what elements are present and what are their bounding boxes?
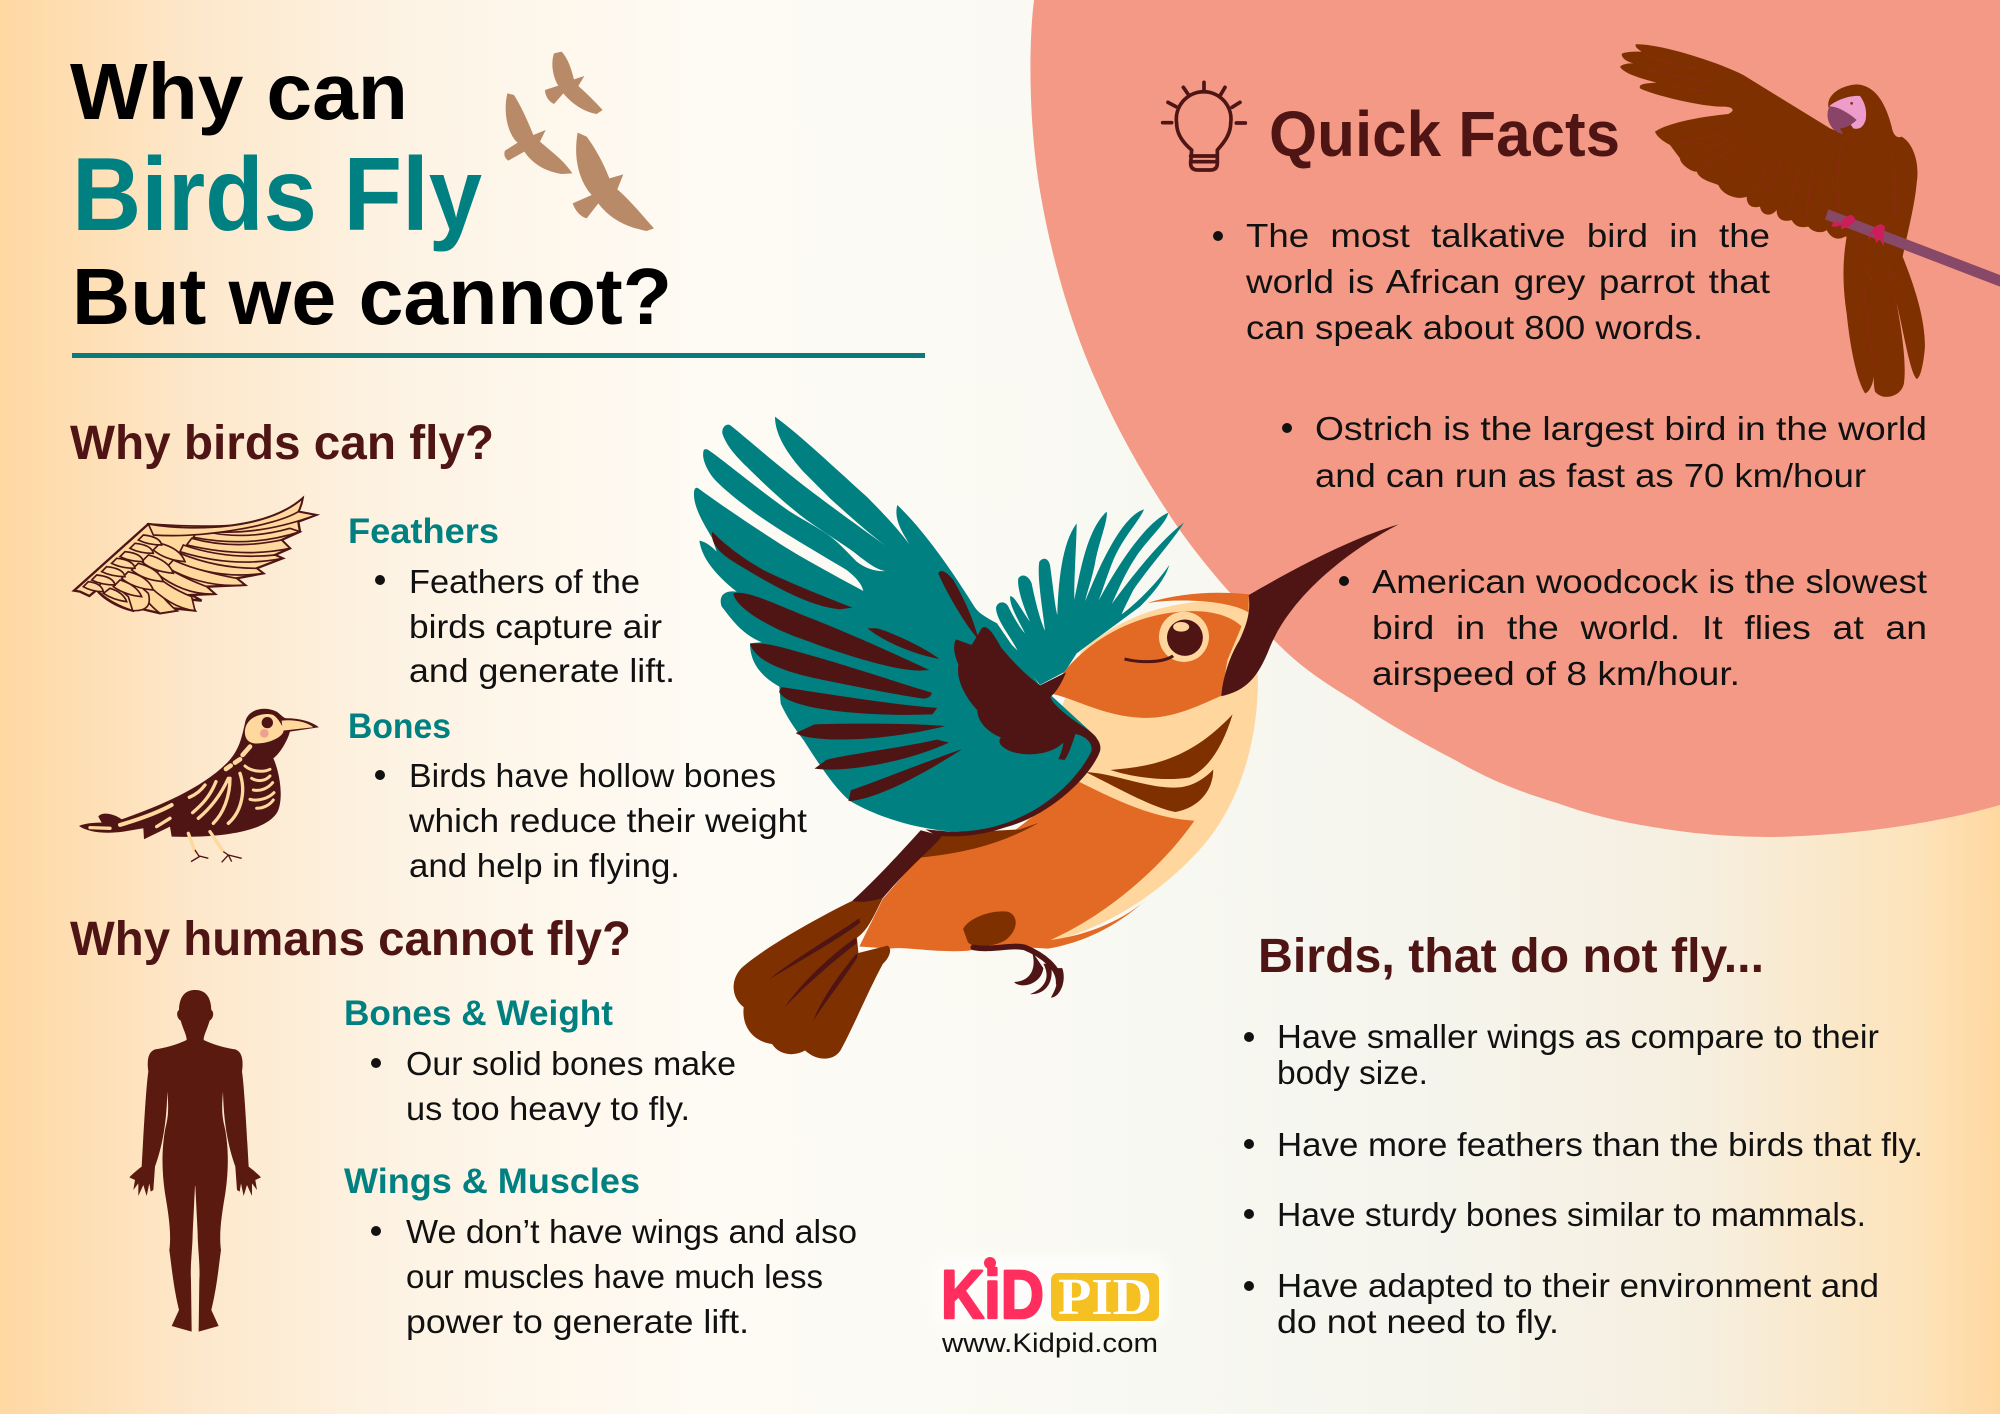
- heading: why humans cannot fly: Why humans cannot fly?: [70, 913, 631, 966]
- icon: parrot on perch: [1620, 44, 2000, 397]
- icon: three flying birds: [504, 52, 654, 231]
- text block: feathers: Feathers of the: [409, 563, 640, 600]
- text block: woodcock fact: [1339, 563, 1927, 692]
- bird body, head, tail: [734, 593, 1258, 1059]
- text block: bones: [348, 707, 807, 884]
- text block: bones: which reduce their weight: [408, 802, 807, 839]
- list: flightless bird traits: body size.: [1277, 1054, 1428, 1091]
- text block: wings and muscles: We don’t have wings and also: [406, 1213, 857, 1250]
- title: Why can: [70, 47, 408, 136]
- text block: wings and muscles: Wings & Muscles: [344, 1162, 640, 1201]
- text block: ostrich fact: Ostrich is the largest bird in the world: [1315, 410, 1927, 447]
- panel: quick facts salmon circle: [1030, 0, 2000, 837]
- list: flightless bird traits: do not need to fly.: [1277, 1303, 1559, 1340]
- text block: ostrich fact: and can run as fast as 70 km/hour: [1315, 457, 1866, 494]
- text block: wings and muscles: our muscles have much less: [406, 1258, 823, 1295]
- list: flightless bird traits: Have more feathers than the birds that fly.: [1277, 1126, 1923, 1163]
- list: flightless bird traits: Have adapted to their environment and: [1277, 1267, 1879, 1304]
- title: Birds Fly: [72, 137, 482, 253]
- icon: hummingbird illustration: [694, 417, 1398, 1059]
- text block: feathers: birds capture air: [409, 608, 662, 645]
- text block: bones and weight: us too heavy to fly.: [406, 1090, 690, 1127]
- list: flightless bird traits: Have sturdy bones similar to mammals.: [1277, 1196, 1866, 1233]
- text block: talkative bird fact: [1213, 217, 1770, 346]
- text block: bones and weight: [344, 994, 736, 1127]
- lower wing stripes, shoulder, beak, eye, leg: [779, 524, 1398, 998]
- heading: why birds can fly: Why birds can fly?: [70, 417, 494, 470]
- logo: Kidpid: PID: [1058, 1269, 1152, 1326]
- list: flightless bird traits: [1244, 1018, 1923, 1340]
- text block: woodcock fact: airspeed of 8 km/hour.: [1372, 655, 1740, 692]
- wing: [694, 417, 1100, 832]
- text block: bones: and help in flying.: [409, 847, 680, 884]
- text block: bones: Bones: [348, 707, 451, 746]
- text block: bones and weight: Bones & Weight: [344, 994, 613, 1033]
- logo: Kidpid: KiD: [941, 1256, 1044, 1333]
- title: But we cannot?: [72, 252, 672, 341]
- text block: feathers: Feathers: [348, 512, 499, 551]
- text block: wings and muscles: [344, 1162, 857, 1340]
- icon: human silhouette: [129, 990, 261, 1332]
- text block: feathers: [348, 512, 675, 689]
- text block: woodcock fact: bird in the world. It flies at an: [1372, 609, 1927, 646]
- list: flightless bird traits: Have smaller wings as compare to their: [1277, 1018, 1879, 1055]
- text block: bones: Birds have hollow bones: [409, 757, 776, 794]
- text block: talkative bird fact: The most talkative bird in the: [1246, 217, 1770, 254]
- icon: light bulb: [1163, 82, 1245, 170]
- icon: feathered wing: [74, 498, 316, 613]
- text block: woodcock fact: American woodcock is the slowest: [1372, 563, 1927, 600]
- logo: Kidpid: [932, 1255, 1168, 1358]
- text block: wings and muscles: power to generate lift.: [406, 1303, 749, 1340]
- text block: feathers: and generate lift.: [409, 652, 675, 689]
- heading: quick facts: Quick Facts: [1269, 98, 1620, 170]
- text block: talkative bird fact: can speak about 800 words.: [1246, 309, 1703, 346]
- text block: bones and weight: Our solid bones make: [406, 1045, 736, 1082]
- icon: bird skeleton: [79, 709, 319, 862]
- crest feathers: [996, 509, 1184, 685]
- title: [70, 47, 672, 341]
- text block: ostrich fact: [1282, 410, 1927, 494]
- logo: Kidpid: www.Kidpid.com: [941, 1328, 1158, 1358]
- text block: talkative bird fact: world is African grey parrot that: [1245, 263, 1770, 300]
- heading: birds that do not fly: Birds, that do not fly...: [1258, 930, 1764, 983]
